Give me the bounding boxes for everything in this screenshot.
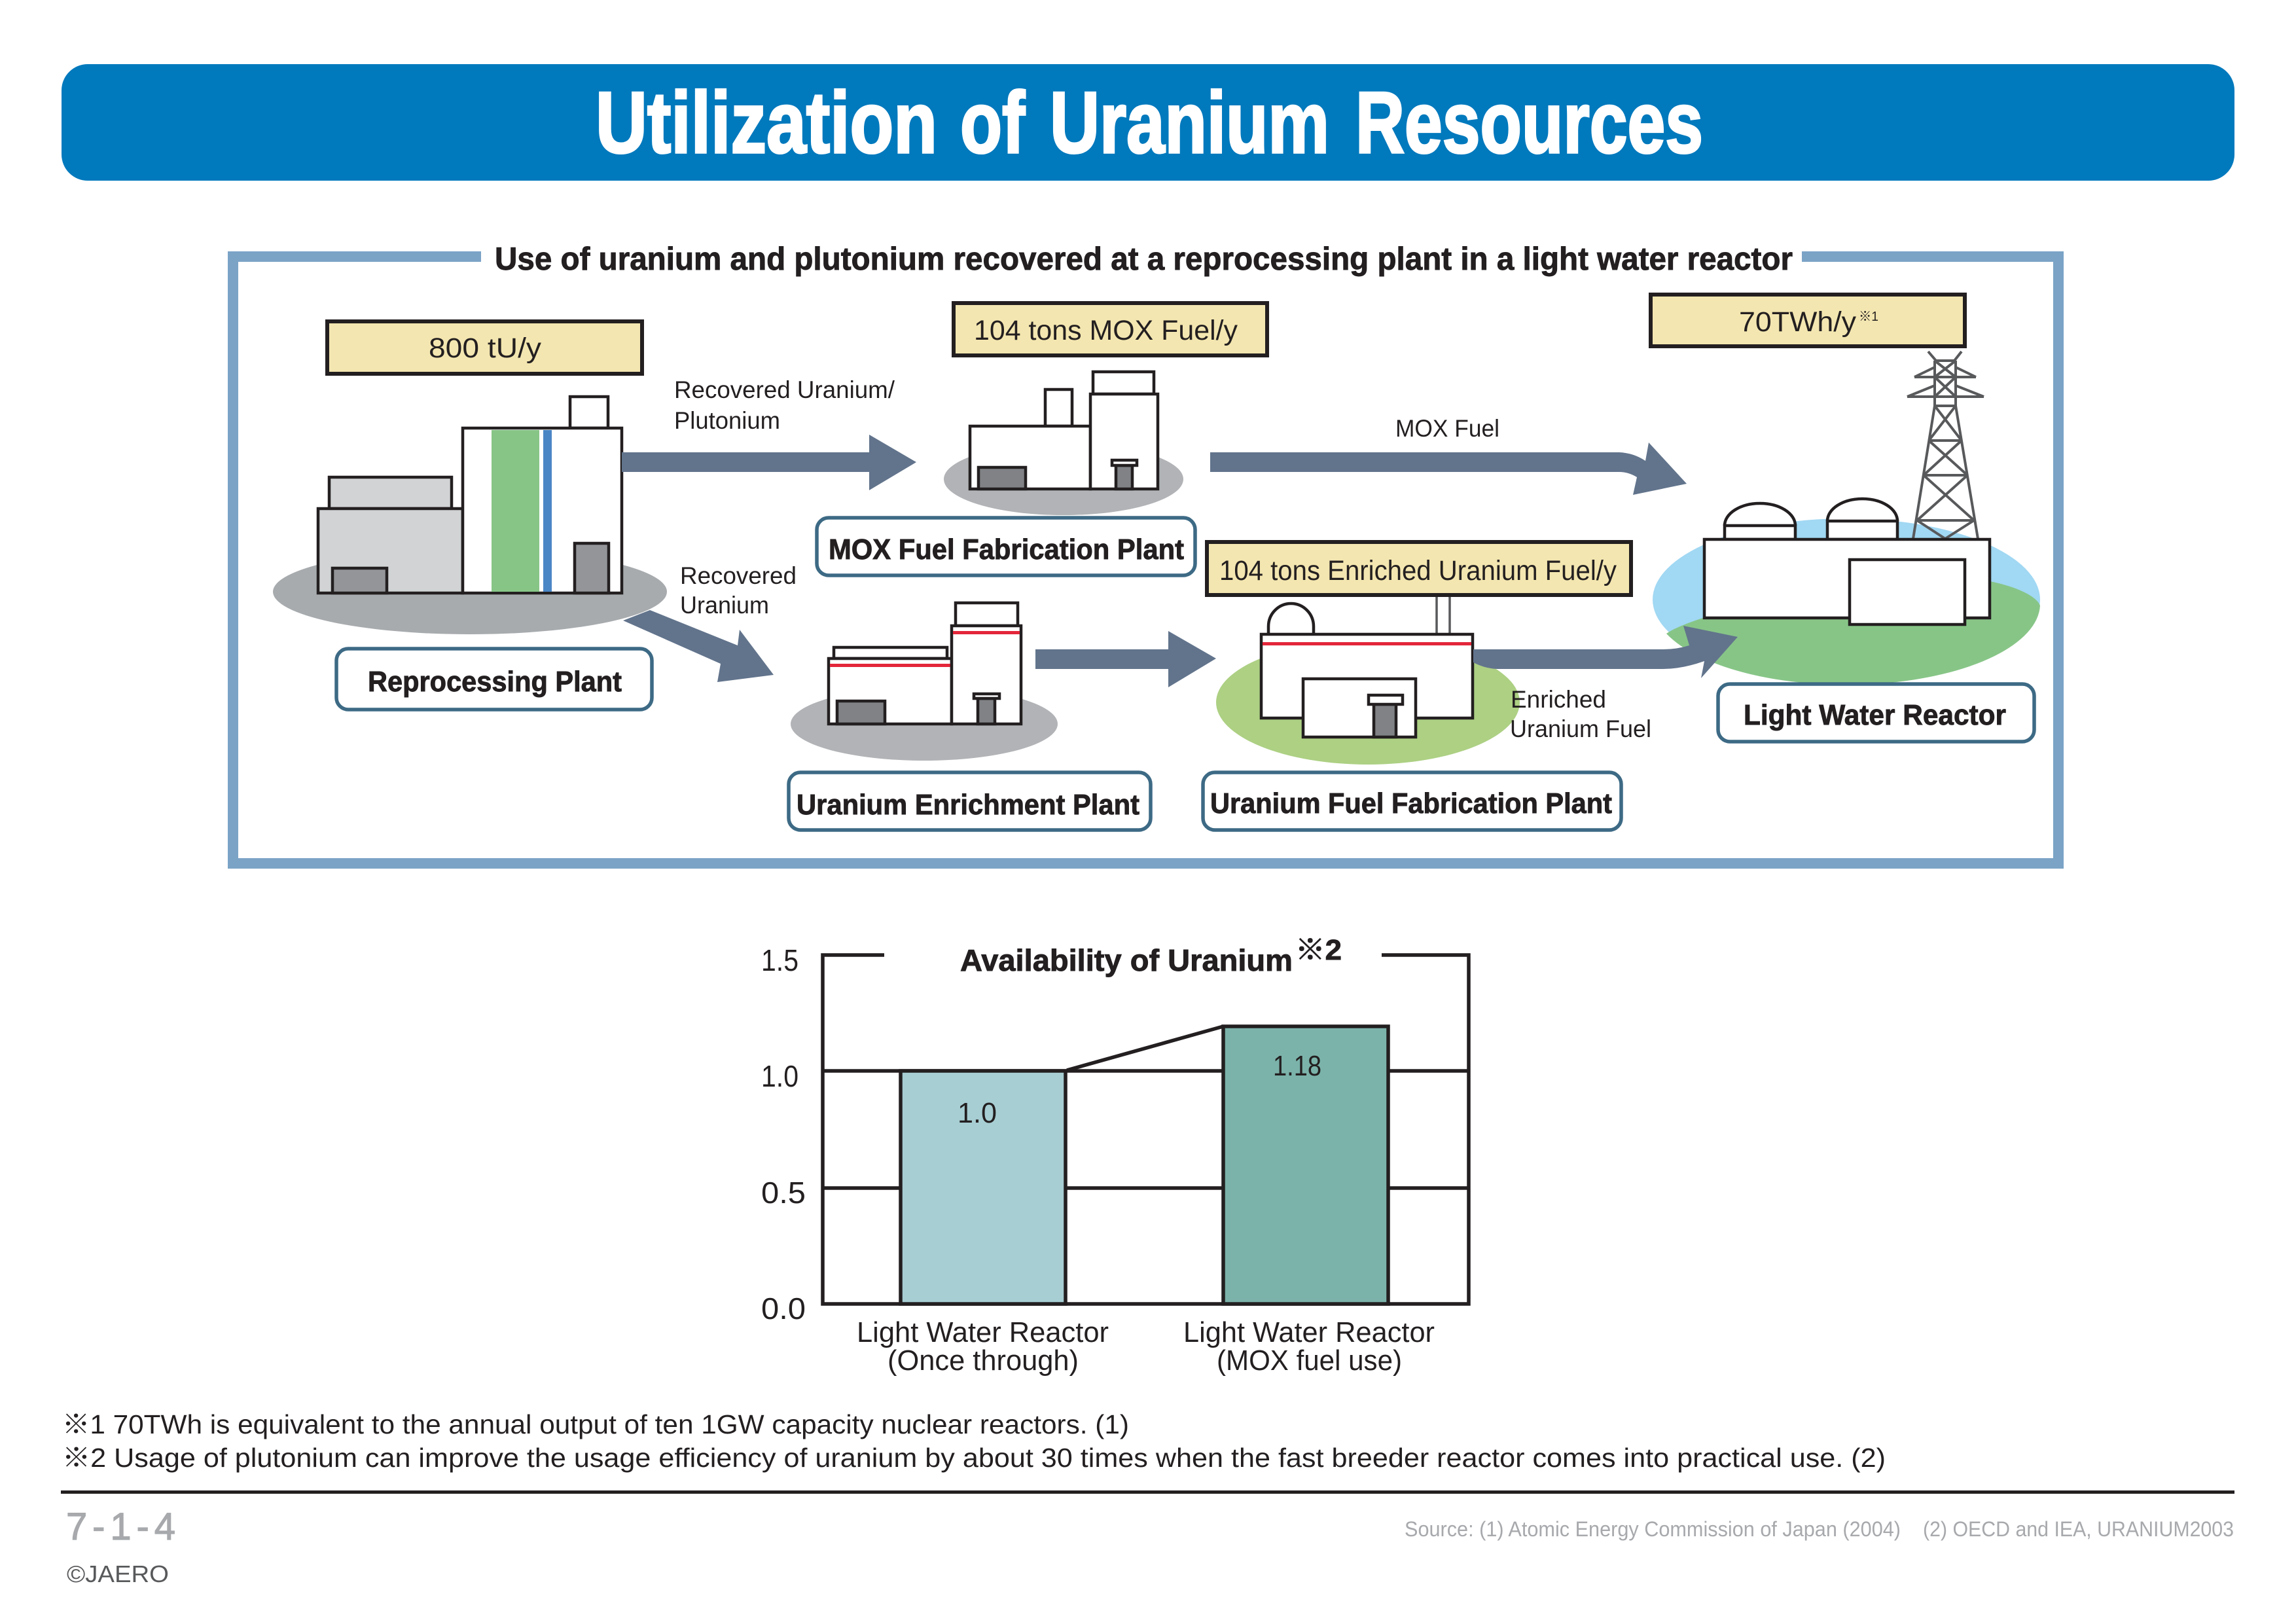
icon: transmission tower (1907, 352, 1984, 539)
label: reprocessing plant: Reprocessing Plant (368, 666, 622, 698)
chart title: Availability of Uranium (960, 943, 1293, 977)
title banner: of (960, 75, 1026, 171)
label: uranium enrichment plant: Uranium Enrichment Plant (797, 789, 1139, 821)
y axis labels (761, 943, 806, 1326)
amount: 70 TWh per year (1651, 295, 1965, 346)
footnotes: ※1 70TWh is equivalent to the annual output of ten 1GW capacity nuclear reactors. (1) (62, 1409, 1129, 1439)
label: MOX fuel fabrication plant (817, 518, 1195, 575)
flow label: recovered uranium and plutonium (674, 376, 895, 434)
label: MOX fuel fabrication plant: MOX Fuel Fabrication Plant (829, 533, 1184, 566)
bar: once through: 1.0 (958, 1097, 997, 1129)
bar: once through (901, 1071, 1066, 1304)
amount: 104 tons MOX fuel (954, 303, 1267, 355)
panel: reprocessing flow (233, 242, 2058, 863)
x axis label: MOX fuel use (1183, 1316, 1435, 1377)
y axis labels: 1.5 (761, 943, 798, 977)
copyright: ©JAERO (67, 1561, 169, 1587)
bar: MOX fuel use: 1.18 (1273, 1050, 1321, 1082)
x axis label: once through: Light Water Reactor (857, 1316, 1109, 1348)
chart title (960, 934, 1342, 977)
uranium fuel fabrication plant illustration (1216, 592, 1520, 765)
label: uranium fuel fabrication plant (1203, 772, 1621, 830)
flow label: recovered uranium: Uranium (680, 592, 769, 619)
increase connector line (1067, 1026, 1223, 1070)
flow label: enriched uranium fuel (1510, 686, 1651, 742)
flow label: recovered uranium and plutonium: Recovered Uranium/ (674, 376, 895, 403)
source (1405, 1517, 2234, 1541)
title banner: Resources (1355, 75, 1703, 171)
label: light water reactor (1718, 684, 2034, 742)
source: (2) OECD and IEA, URANIUM2003 (1923, 1517, 2234, 1541)
label: light water reactor: Light Water Reactor (1744, 699, 2006, 731)
panel heading: Use of uranium and plutonium recovered at a reprocessing plant in a light water reactor (495, 242, 1793, 277)
amount: 104 tons MOX fuel: 104 tons MOX Fuel/y (974, 315, 1238, 346)
title banner: Utilization (596, 75, 937, 171)
page number: 7-1-4 (66, 1506, 175, 1548)
arrow: enriched fuel to reactor (1473, 626, 1738, 678)
x axis label: once through (857, 1316, 1109, 1377)
label: uranium fuel fabrication plant: Uranium Fuel Fabrication Plant (1210, 787, 1612, 820)
amount: 104 tons enriched uranium fuel: 104 tons Enriched Uranium Fuel/y (1219, 555, 1617, 586)
y axis labels: 1.0 (761, 1059, 798, 1093)
y axis labels: 0.0 (761, 1291, 806, 1326)
light water reactor illustration (1653, 352, 2040, 685)
flow label: enriched uranium fuel: Uranium Fuel (1510, 715, 1651, 742)
bar chart: availability of uranium (761, 934, 1469, 1377)
x axis label: MOX fuel use: (MOX fuel use) (1217, 1344, 1402, 1377)
amount: 104 tons enriched uranium fuel (1207, 542, 1631, 595)
bar: MOX fuel use (1223, 1026, 1388, 1304)
y axis labels: 0.5 (761, 1176, 806, 1210)
label: reprocessing plant (336, 649, 652, 710)
amount: 800 tU/y (327, 321, 642, 374)
arrow: to enrichment plant (623, 610, 774, 682)
amount: 70 TWh per year: 70TWh/y (1739, 306, 1857, 338)
x axis label: MOX fuel use: Light Water Reactor (1183, 1316, 1435, 1348)
flow label: MOX fuel: MOX Fuel (1395, 415, 1499, 442)
amount: 70 TWh per year: ※1 (1859, 310, 1878, 324)
source: Source: (1) Atomic Energy Commission of Japan (2004) (1405, 1517, 1901, 1541)
uranium enrichment plant illustration (791, 603, 1058, 761)
x axis label: once through: (Once through) (888, 1344, 1079, 1377)
footnotes (62, 1409, 1886, 1473)
MOX fuel fabrication plant illustration (944, 372, 1183, 515)
chart title: ※2 (1295, 934, 1342, 966)
flow label: recovered uranium and plutonium: Plutonium (674, 407, 780, 434)
reprocessing plant illustration (273, 397, 667, 634)
title banner: Uranium (1050, 75, 1329, 171)
title banner (62, 64, 2234, 181)
flow label: recovered uranium (680, 562, 797, 619)
arrow: to MOX plant (622, 435, 916, 490)
footnotes: ※2 Usage of plutonium can improve the usage efficiency of uranium by about 30 times when the fast breeder reactor comes into practical use. (2) (62, 1443, 1886, 1473)
chart grid and axes (823, 955, 1469, 1304)
flow label: recovered uranium: Recovered (680, 562, 797, 589)
flow label: enriched uranium fuel: Enriched (1511, 686, 1606, 713)
amount: 800 tU/y: 800 tU/y (429, 333, 542, 364)
arrow: enrichment to fuel fabrication (1035, 631, 1216, 687)
arrow: MOX fuel to reactor (1210, 442, 1687, 495)
label: uranium enrichment plant (789, 772, 1151, 830)
